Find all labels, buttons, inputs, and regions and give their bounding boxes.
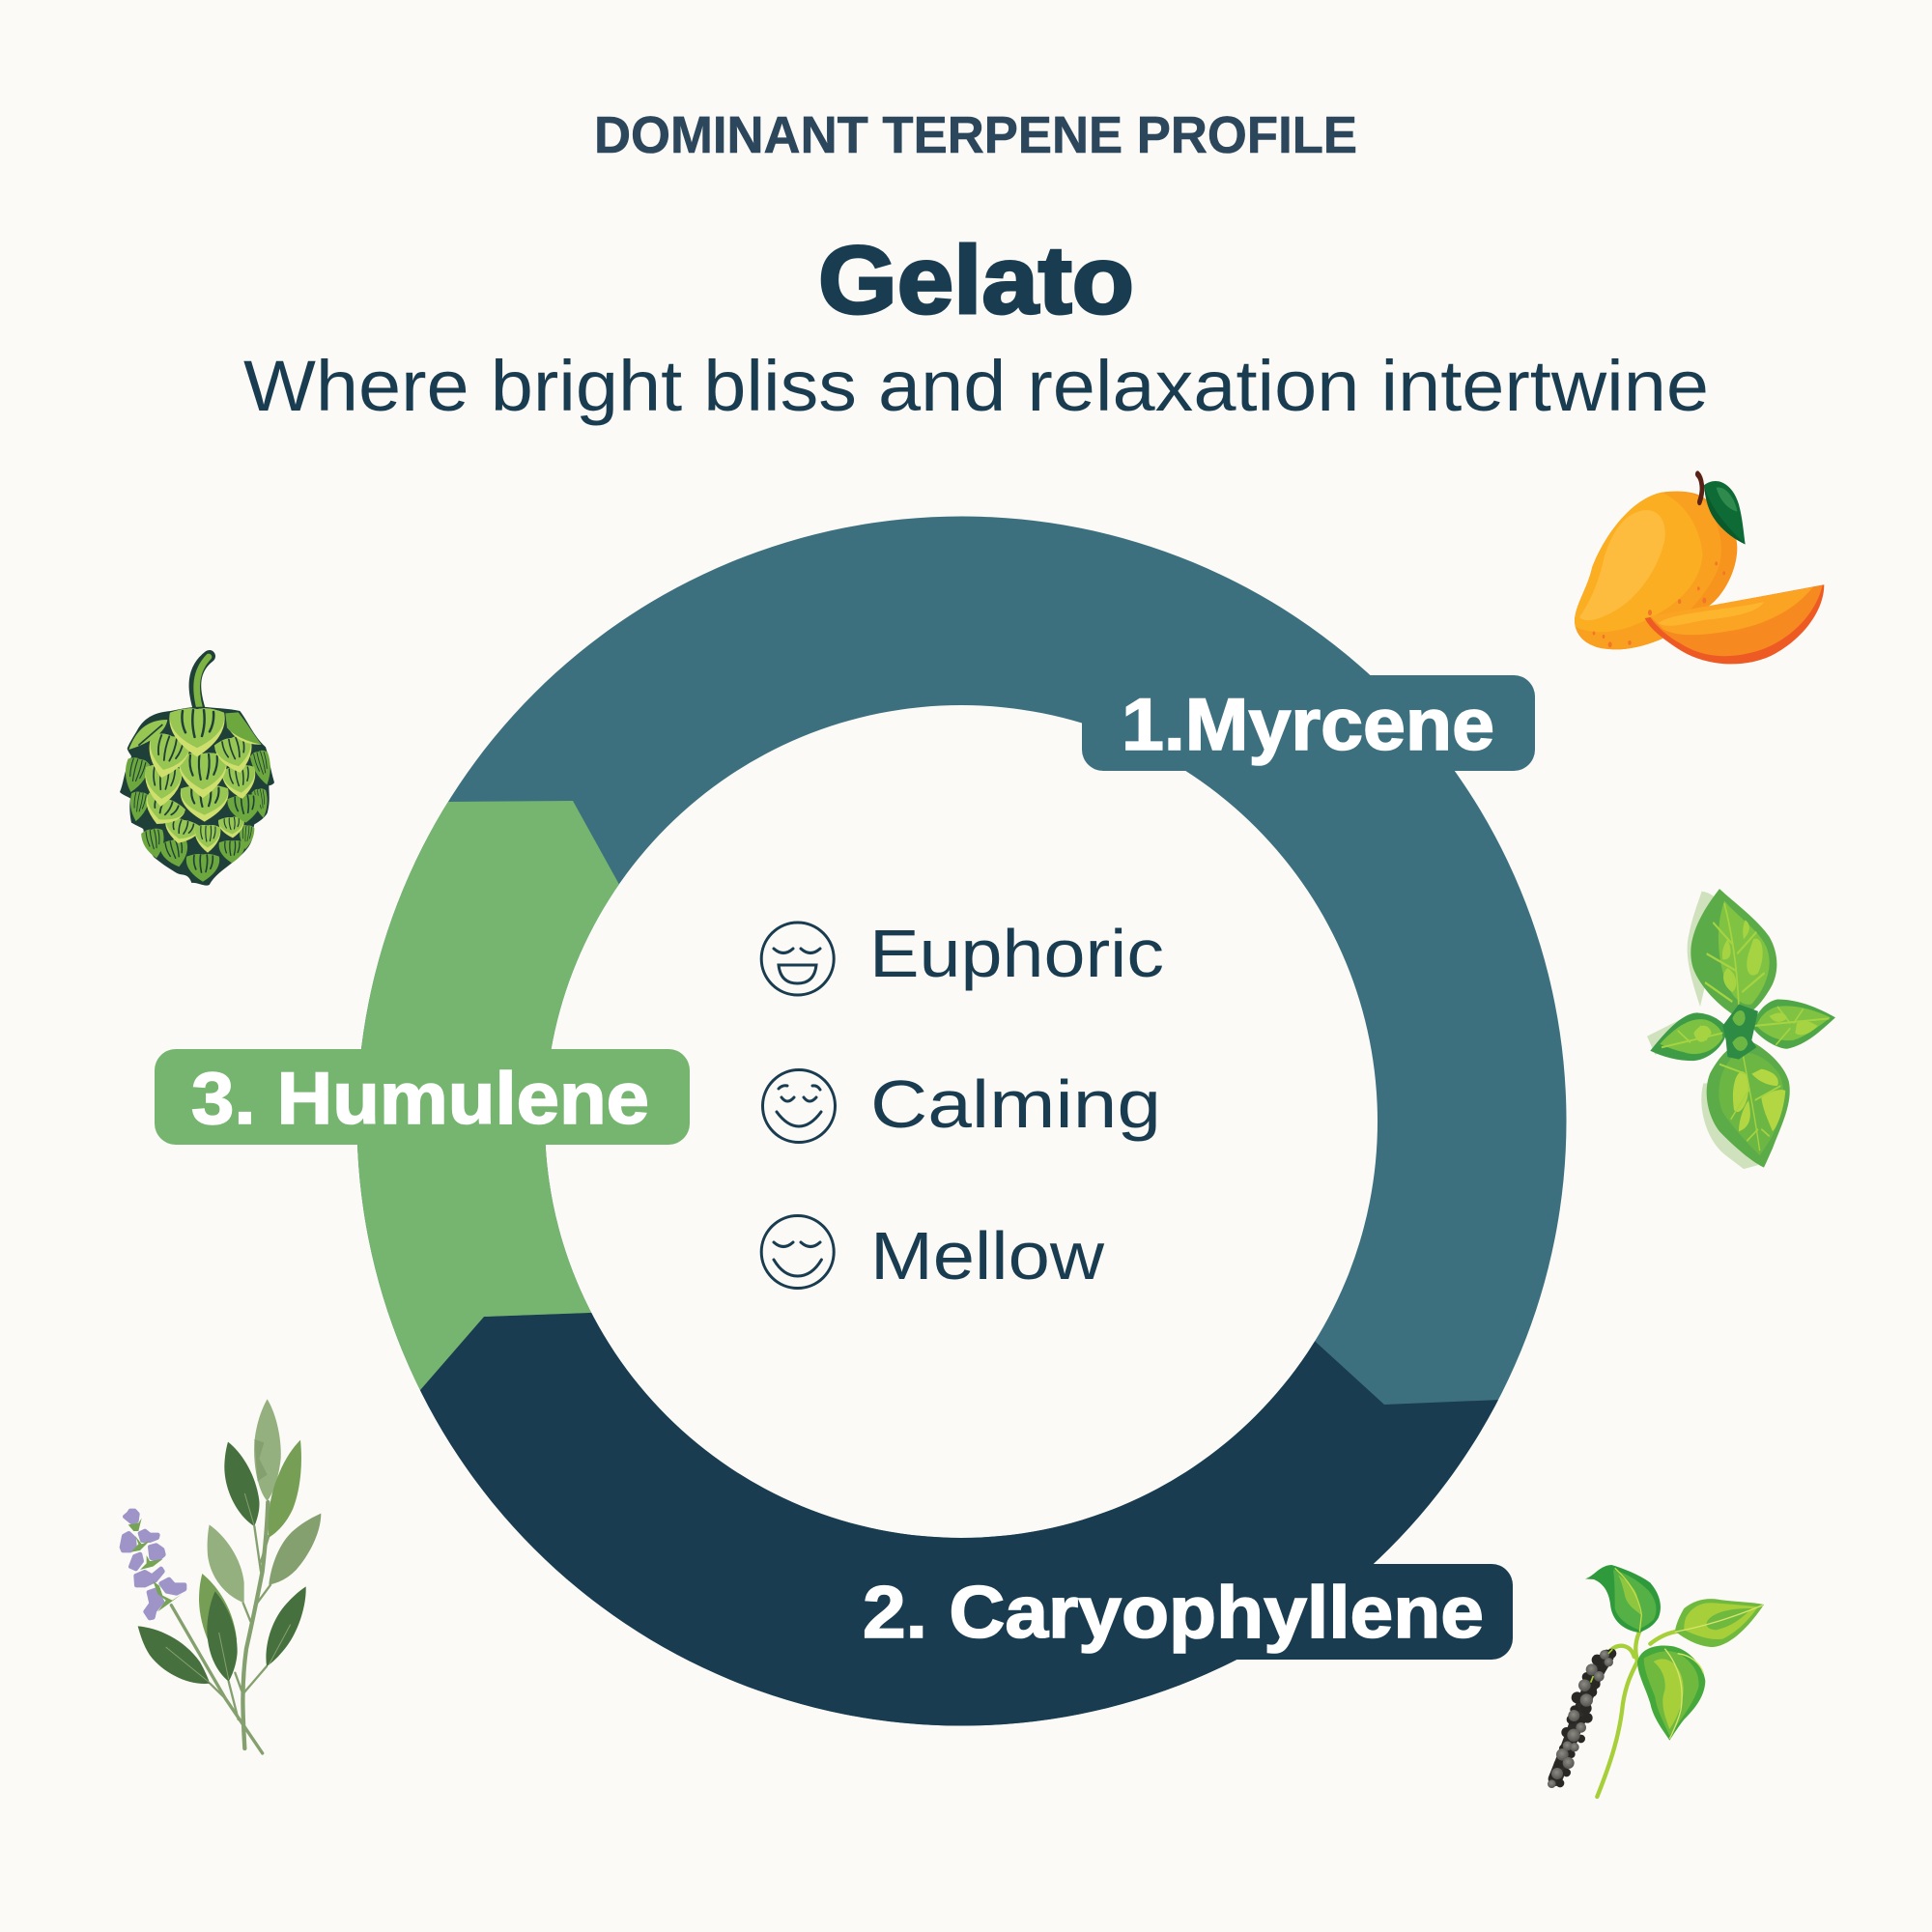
- segment: Caryophyllene: [420, 1313, 1498, 1725]
- donut chart: terpene shares: [357, 516, 1567, 1725]
- segment: Humulene: [357, 801, 619, 1390]
- effect text: Calming: [870, 1066, 1161, 1142]
- effect: Mellow: [761, 1215, 1104, 1293]
- effect: Calming: [763, 1066, 1161, 1142]
- label: 1. Myrcene: 1.Myrcene: [1122, 684, 1494, 766]
- icon: content face: [763, 1070, 835, 1142]
- label: 3. Humulene: 3. Humulene: [191, 1058, 649, 1140]
- effect: Euphoric: [761, 916, 1164, 995]
- eyebrow heading: DOMINANT TERPENE PROFILE: [594, 106, 1357, 164]
- icon: laughing face: [761, 923, 834, 995]
- label: 2. Caryophyllene: 2. Caryophyllene: [863, 1572, 1484, 1654]
- illustration: basil: [1647, 889, 1835, 1169]
- segment: Myrcene: [357, 516, 1567, 1725]
- illustration: hop cone: [120, 656, 276, 886]
- illustration: mango: [1575, 474, 1824, 664]
- title: strain name: Gelato: [818, 226, 1134, 333]
- effect text: Mellow: [870, 1218, 1104, 1293]
- effect text: Euphoric: [869, 916, 1164, 991]
- icon: smiling face: [761, 1215, 834, 1289]
- illustration: black pepper: [1548, 1565, 1764, 1797]
- subtitle: Where bright bliss and relaxation intertwine: [243, 346, 1709, 426]
- illustration: sage and lavender: [122, 1399, 321, 1753]
- label: 1. Myrcene: [1082, 675, 1535, 771]
